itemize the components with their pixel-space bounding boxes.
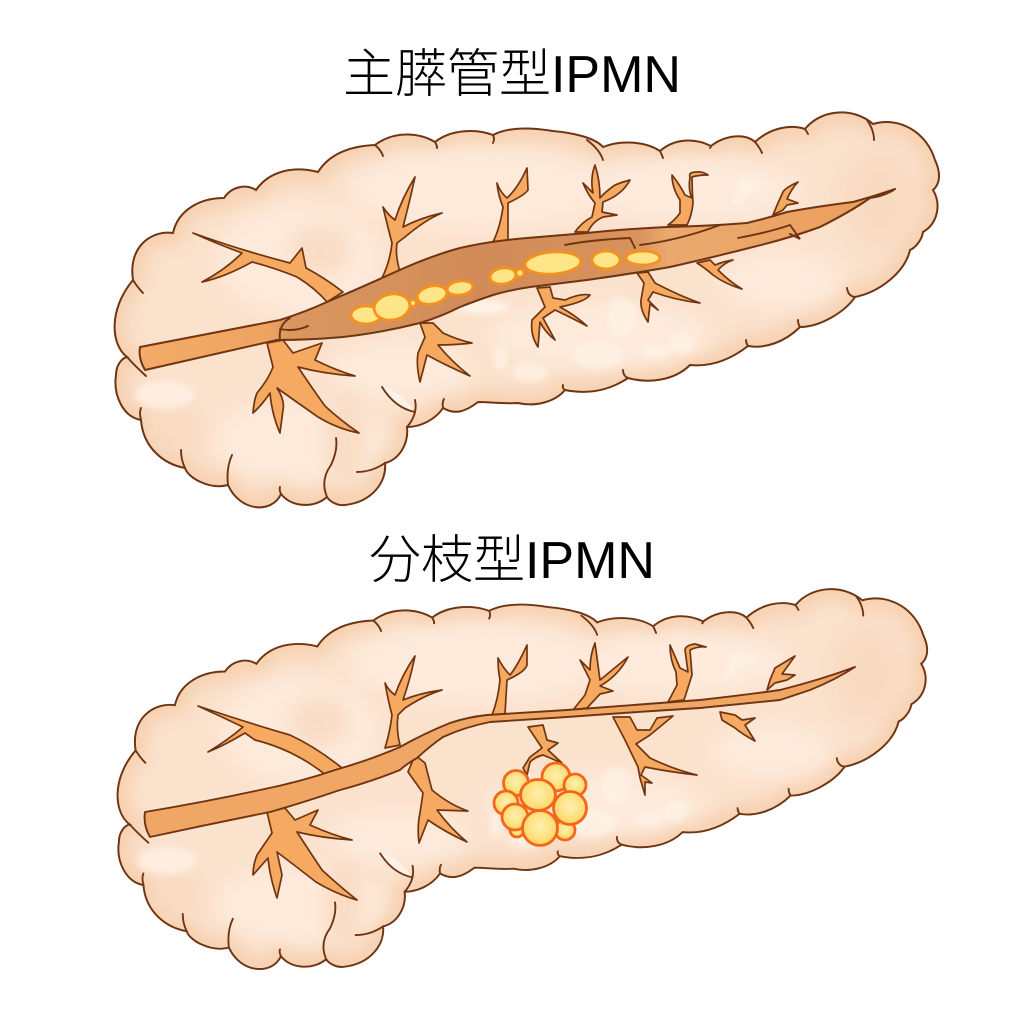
title: main duct type: 主膵管型IPMN [343, 46, 681, 104]
panel: main duct IPMN [115, 112, 939, 507]
panel: branch duct IPMN [118, 589, 927, 969]
title: branch duct type: 分枝型IPMN [369, 532, 655, 590]
branch-duct cyst cluster [494, 763, 586, 846]
highlight under dilated duct [456, 300, 508, 314]
pancreas body, top [115, 112, 939, 507]
illustration canvas [114, 48, 940, 970]
side branches, top [193, 165, 798, 433]
main pancreatic duct, dilated [140, 189, 895, 370]
main pancreatic duct, normal calibre [145, 667, 855, 837]
inner duct wall lines [280, 225, 800, 340]
pancreas body, bottom [118, 589, 927, 969]
side branches, bottom [198, 643, 795, 900]
mucin-filled cystic dilations [351, 250, 660, 324]
